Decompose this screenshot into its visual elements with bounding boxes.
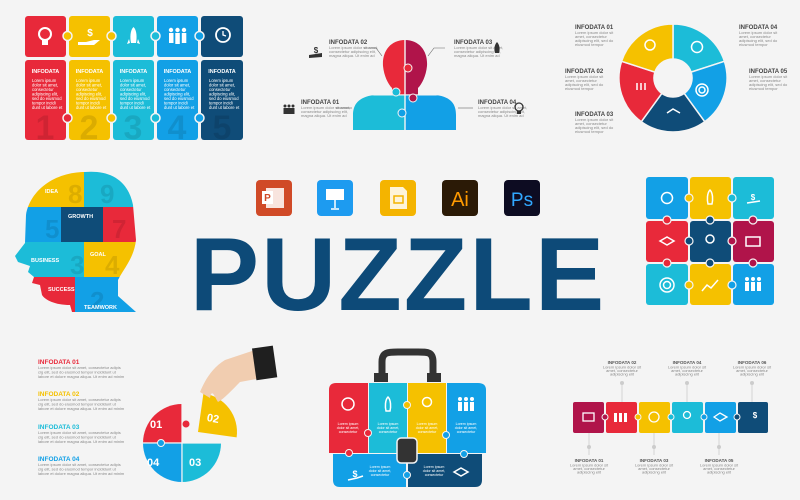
panel: big puzzle head profile: SUCCESS [48,287,75,293]
column 5 navy: sed do eiusmod [209,96,239,101]
ring labels: INFODATA 01 [575,25,614,31]
column 5 navy: consectetur [209,87,231,92]
panel: horizontal timeline puzzle: amet, consectetur [573,466,606,471]
panel: horizontal timeline puzzle: amet, consectetur [606,368,639,373]
column 3 cyan: Lorem ipsum [120,78,145,83]
panel: circular ring puzzle [565,24,788,134]
column 4 blue: INFODATA [164,69,191,75]
panel: text list: labore et dolore magna aliqua. Ut enim ad minim [38,439,125,444]
panel: big puzzle head profile: IDEA [45,189,58,195]
column 4 blue: 4 [168,109,187,147]
column 3 cyan: INFODATA [120,69,147,75]
app icons row [256,180,540,216]
panel: briefcase [329,352,486,487]
panel: horizontal timeline puzzle: INFODATA 01 [575,458,604,463]
ring labels: Lorem ipsum dolor sit [749,74,788,79]
panel: horizontal timeline puzzle: Lorem ipsum dolor sit [635,462,674,468]
panel: text list: Lorem ipsum dolor sit amet, consectetur adipis [38,430,121,435]
column 3 cyan: dolor sit amet, [120,82,146,88]
panel: briefcase: $ [352,469,358,479]
column 5 navy: adipiscing elit, [209,92,235,96]
column 2 yellow: adipiscing elit, [76,92,102,96]
panel: briefcase: dolor sit amet, [337,426,359,430]
label: INFODATA 01: consectetur adipiscing elit, [301,109,348,114]
ring labels: eiusmod tempor [575,42,604,47]
panel: horizontal timeline puzzle: INFODATA 02 [608,360,637,365]
label: INFODATA 03: magna aliqua. Ut enim ad [454,53,500,58]
ring segments [619,24,727,132]
panel: briefcase: dolor sit amet, [423,469,445,473]
label: INFODATA 02: magna aliqua. Ut enim ad [329,53,375,58]
label: INFODATA 02: INFODATA 02 [329,40,368,46]
panel: horizontal timeline puzzle: adipiscing elit [740,372,765,376]
column 1 red: dolor sit amet, [32,82,58,88]
panel: horizontal timeline puzzle: adipiscing elit [577,470,602,474]
panel: text list: INFODATA 01 [38,359,80,366]
panel: text list [38,359,125,476]
panel: horizontal timeline puzzle: INFODATA 04 [673,360,702,365]
ring labels: Lorem ipsum dolor sit [575,30,614,35]
panel: horizontal timeline puzzle: adipiscing elit [610,372,635,376]
column 1 red: INFODATA [32,69,59,75]
column 2 yellow: sed do eiusmod [76,96,106,101]
puzzle knobs [63,32,204,122]
panel: horizontal timeline puzzle: adipiscing elit [707,470,732,474]
label: INFODATA 04: consectetur adipiscing elit, [478,109,525,114]
panel: text list: labore et dolore magna aliqua. Ut enim ad minim [38,406,125,411]
panel: horizontal timeline puzzle: adipiscing elit [675,372,700,376]
panel: horizontal timeline puzzle: amet, consectetur [638,466,671,471]
panel: briefcase: Lorem ipsum [424,465,444,469]
icon: Keynote [317,180,353,216]
panel: text list: cig elit, sed do eiusmod tempor incididunt ut [38,370,117,374]
column 1 red: 1 [36,109,54,147]
label: INFODATA 01: INFODATA 01 [301,100,340,106]
panel: briefcase: dolor sit amet, [369,469,391,473]
panel: briefcase: consectetur [339,430,358,434]
icon: Photoshop: Ps [511,190,533,211]
label: INFODATA 02 [309,40,382,58]
panel: briefcase: dolor sit amet, [416,426,438,430]
column 2 yellow: dunt ut labore et [76,105,107,110]
ring labels: Lorem ipsum dolor sit [575,117,614,122]
label: INFODATA 03: Lorem ipsum dolor sit amet, [454,45,503,50]
column 3 cyan: sed do eiusmod [120,96,150,101]
panel: big puzzle head profile: 1 [30,286,44,316]
label: INFODATA 01: Lorem ipsum dolor sit amet, [301,105,350,110]
column 1 red: consectetur [32,87,54,92]
panel: horizontal timeline puzzle: Lorem ipsum dolor sit [668,364,707,370]
column 1 red [25,16,66,147]
column 4 blue: Lorem ipsum [164,78,189,83]
ring labels: eiusmod tempor [749,86,778,91]
panel: circle puzzle with hand [140,346,277,486]
panel: text list: Lorem ipsum dolor sit amet, consectetur adipis [38,462,121,467]
panel: circle puzzle with hand: 03 [189,457,201,469]
column 2 yellow [69,16,110,147]
ring icons [637,40,708,113]
panel: horizontal timeline puzzle: $ [753,411,758,420]
icon: Illustrator [442,180,478,216]
panel: briefcase: consectetur [457,430,476,434]
panel: horizontal timeline puzzle: Lorem ipsum dolor sit [733,364,772,370]
ring labels: amet, consectetur [575,121,607,126]
column 5 navy: tempor incidi [209,100,233,106]
column 3 cyan: 3 [124,109,142,147]
panel: horizontal timeline puzzle: INFODATA 05 [705,458,734,463]
panel: circle puzzle with hand: 02 [206,412,220,426]
panel: horizontal timeline puzzle: amet, consectetur [671,368,704,373]
ring labels: adipiscing elit, sed do [575,38,614,43]
column 2 yellow: consectetur [76,87,98,92]
column 4 blue: consectetur [164,87,186,92]
label: INFODATA 03: consectetur adipiscing elit, [454,49,501,54]
icon: PowerPoint [256,180,292,216]
ring labels: Lorem ipsum dolor sit [565,74,604,79]
column 1 red: tempor incidi [32,100,56,106]
column 2 yellow: $ [87,28,93,39]
panel: text list: cig elit, sed do eiusmod tempor incididunt ut [38,434,117,440]
panel: text list: labore et dolore magna aliqua. Ut enim ad minim [38,374,125,379]
panel: horizontal timeline puzzle: amet, consectetur [703,466,736,471]
column 1 red: adipiscing elit, [32,92,58,96]
column 5 navy: dunt ut labore et [209,105,240,110]
panel: 3x3 icon grid: $ [751,193,756,202]
label: INFODATA 03 [428,40,503,58]
panel: big puzzle head profile [10,170,139,316]
label: INFODATA 04: INFODATA 04 [478,100,517,106]
panel: briefcase: consectetur [418,430,437,434]
column 5 navy [201,16,243,147]
label: INFODATA 04: Lorem ipsum dolor sit amet, [478,105,527,110]
column 5 navy: 5 [213,109,231,147]
label: INFODATA 02: consectetur adipiscing elit, [329,49,376,54]
label: INFODATA 01: magna aliqua. Ut enim ad [301,113,347,118]
column 5 navy: INFODATA [208,69,236,75]
panel: 3x3 icon grid [646,177,774,305]
ring labels: amet, consectetur [575,34,607,39]
panel: briefcase: consectetur [371,473,390,477]
column 2 yellow: INFODATA [76,69,103,75]
icon: PowerPoint: P [264,193,271,204]
column 3 cyan: dunt ut labore et [120,105,151,110]
ring labels: amet, consectetur [565,78,597,83]
column 3 cyan: consectetur [120,87,142,92]
panel: horizontal timeline puzzle: Lorem ipsum dolor sit [700,462,739,468]
label: INFODATA 01 [284,100,352,118]
panel: big puzzle head profile: 8 [68,179,82,209]
ring labels: eiusmod tempor [575,129,604,134]
label: INFODATA 04: magna aliqua. Ut enim ad [478,113,524,118]
column 3 cyan [113,16,154,147]
panel: horizontal timeline puzzle: INFODATA 06 [738,360,767,365]
title: PUZZLE [190,217,606,333]
panel: big puzzle head profile: TEAMWORK [84,305,117,311]
panel: horizontal timeline puzzle: adipiscing elit [642,470,667,474]
panel: circle puzzle with hand: 04 [147,457,160,469]
ring labels: adipiscing elit, sed do [565,82,604,87]
ring labels: adipiscing elit, sed do [739,38,778,43]
panel: briefcase: dolor sit amet, [455,426,477,430]
ring labels: INFODATA 03 [575,112,614,118]
panel: text list: INFODATA 02 [38,391,80,398]
column 4 blue: tempor incidi [164,100,188,106]
column 1 red: dunt ut labore et [32,105,63,110]
column 4 blue: dolor sit amet, [164,82,190,88]
panel: big puzzle head profile: 4 [105,250,120,280]
ring labels: amet, consectetur [739,34,771,39]
panel: big puzzle head profile: 5 [45,214,59,244]
column 2 yellow: 2 [80,109,98,147]
ring labels [565,25,788,134]
panel: briefcase: Lorem ipsum [370,465,390,469]
ring labels: adipiscing elit, sed do [749,82,788,87]
label: INFODATA 02: $ [314,46,319,55]
panel: big puzzle head profile: 9 [100,179,114,209]
panel: text list: cig elit, sed do eiusmod tempor incididunt ut [38,402,117,406]
panel: five column puzzle [25,16,243,147]
panel: text list: cig elit, sed do eiusmod tempor incididunt ut [38,466,117,472]
column 3 cyan: adipiscing elit, [120,92,146,96]
panel: big puzzle head profile: 2 [90,286,104,316]
panel: briefcase: dolor sit amet, [377,426,399,430]
panel: horizontal timeline puzzle: INFODATA 03 [640,458,669,463]
ring labels: INFODATA 04 [739,25,778,31]
panel: briefcase: Lorem ipsum [338,422,358,426]
panel: big puzzle head profile: 3 [70,250,84,280]
panel: text list: labore et dolore magna aliqua. Ut enim ad minim [38,471,125,476]
panel: text list: INFODATA 03 [38,424,80,431]
icon: Illustrator: Ai [451,189,469,211]
label: INFODATA 04 [458,100,527,118]
column 4 blue: sed do eiusmod [164,96,194,101]
panel: circle puzzle with hand: 01 [150,419,162,431]
ring labels: eiusmod tempor [565,86,594,91]
ring labels: amet, consectetur [749,78,781,83]
column 2 yellow: Lorem ipsum [76,78,101,83]
panel: text list: INFODATA 04 [38,456,80,463]
panel: briefcase: Lorem ipsum [378,422,398,426]
column 1 red: sed do eiusmod [32,96,62,101]
icon: Google Slides [380,180,416,216]
panel: head silhouette puzzle [284,38,527,135]
panel: horizontal timeline puzzle: Lorem ipsum dolor sit [603,364,642,370]
panel: text list: Lorem ipsum dolor sit amet, consectetur adipis [38,365,121,370]
panel: horizontal timeline puzzle [570,360,772,474]
panel: big puzzle head profile: GROWTH [68,214,93,220]
panel: text list: Lorem ipsum dolor sit amet, consectetur adipis [38,397,121,402]
column 2 yellow: tempor incidi [76,100,100,106]
head shape quadrants [353,40,456,130]
column 4 blue: dunt ut labore et [164,105,195,110]
column 2 yellow: dolor sit amet, [76,82,102,88]
label: INFODATA 02: Lorem ipsum dolor sit amet, [329,45,378,50]
label: INFODATA 03: INFODATA 03 [454,40,493,46]
panel: briefcase: consectetur [379,430,398,434]
ring labels: INFODATA 02 [565,69,604,75]
column 5 navy: Lorem ipsum [209,78,234,83]
column 4 blue [157,16,198,147]
panel: big puzzle head profile: 7 [112,214,126,244]
ring labels: Lorem ipsum dolor sit [739,30,778,35]
column 1 red: Lorem ipsum [32,78,57,83]
panel: big puzzle head profile: BUSINESS [31,258,59,264]
icon: Photoshop [504,180,540,216]
ring labels: INFODATA 05 [749,69,788,75]
panel: horizontal timeline puzzle: amet, consectetur [736,368,769,373]
panel: briefcase: Lorem ipsum [456,422,476,426]
ring labels: adipiscing elit, sed do [575,125,614,130]
panel: briefcase: Lorem ipsum [417,422,437,426]
column 4 blue: adipiscing elit, [164,92,190,96]
column 5 navy: dolor sit amet, [209,82,235,88]
ring labels: eiusmod tempor [739,42,768,47]
column 3 cyan: tempor incidi [120,100,144,106]
panel: horizontal timeline puzzle: Lorem ipsum dolor sit [570,462,609,468]
panel: briefcase: consectetur [425,473,444,477]
panel: big puzzle head profile: GOAL [90,252,107,258]
